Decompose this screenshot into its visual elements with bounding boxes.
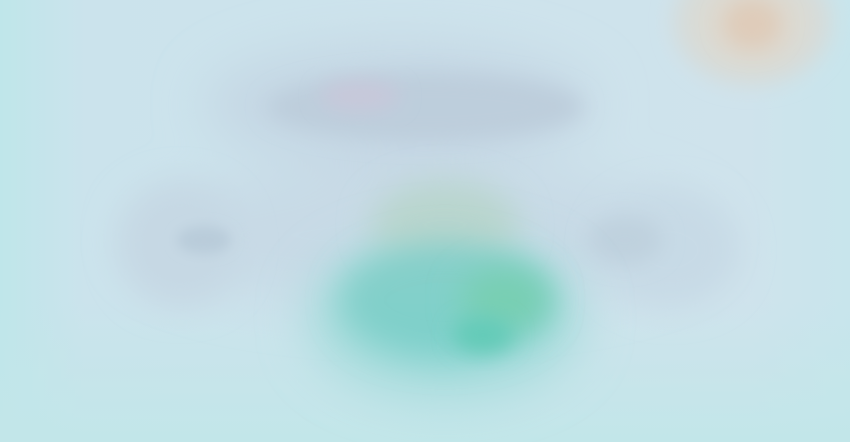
teal bowl [341, 242, 549, 358]
left small gray mark [177, 226, 231, 254]
backdrop panel [135, 43, 705, 305]
green highlight [460, 268, 550, 332]
right gray mark [587, 216, 663, 264]
pale green dome [371, 181, 519, 269]
pink accent [320, 81, 400, 111]
top gray bar [267, 73, 583, 141]
bottom tint [0, 300, 850, 442]
deep teal spot [453, 317, 513, 353]
outer teal halo [310, 240, 580, 396]
side lobes [118, 183, 740, 308]
peach circle top right [672, 0, 832, 86]
